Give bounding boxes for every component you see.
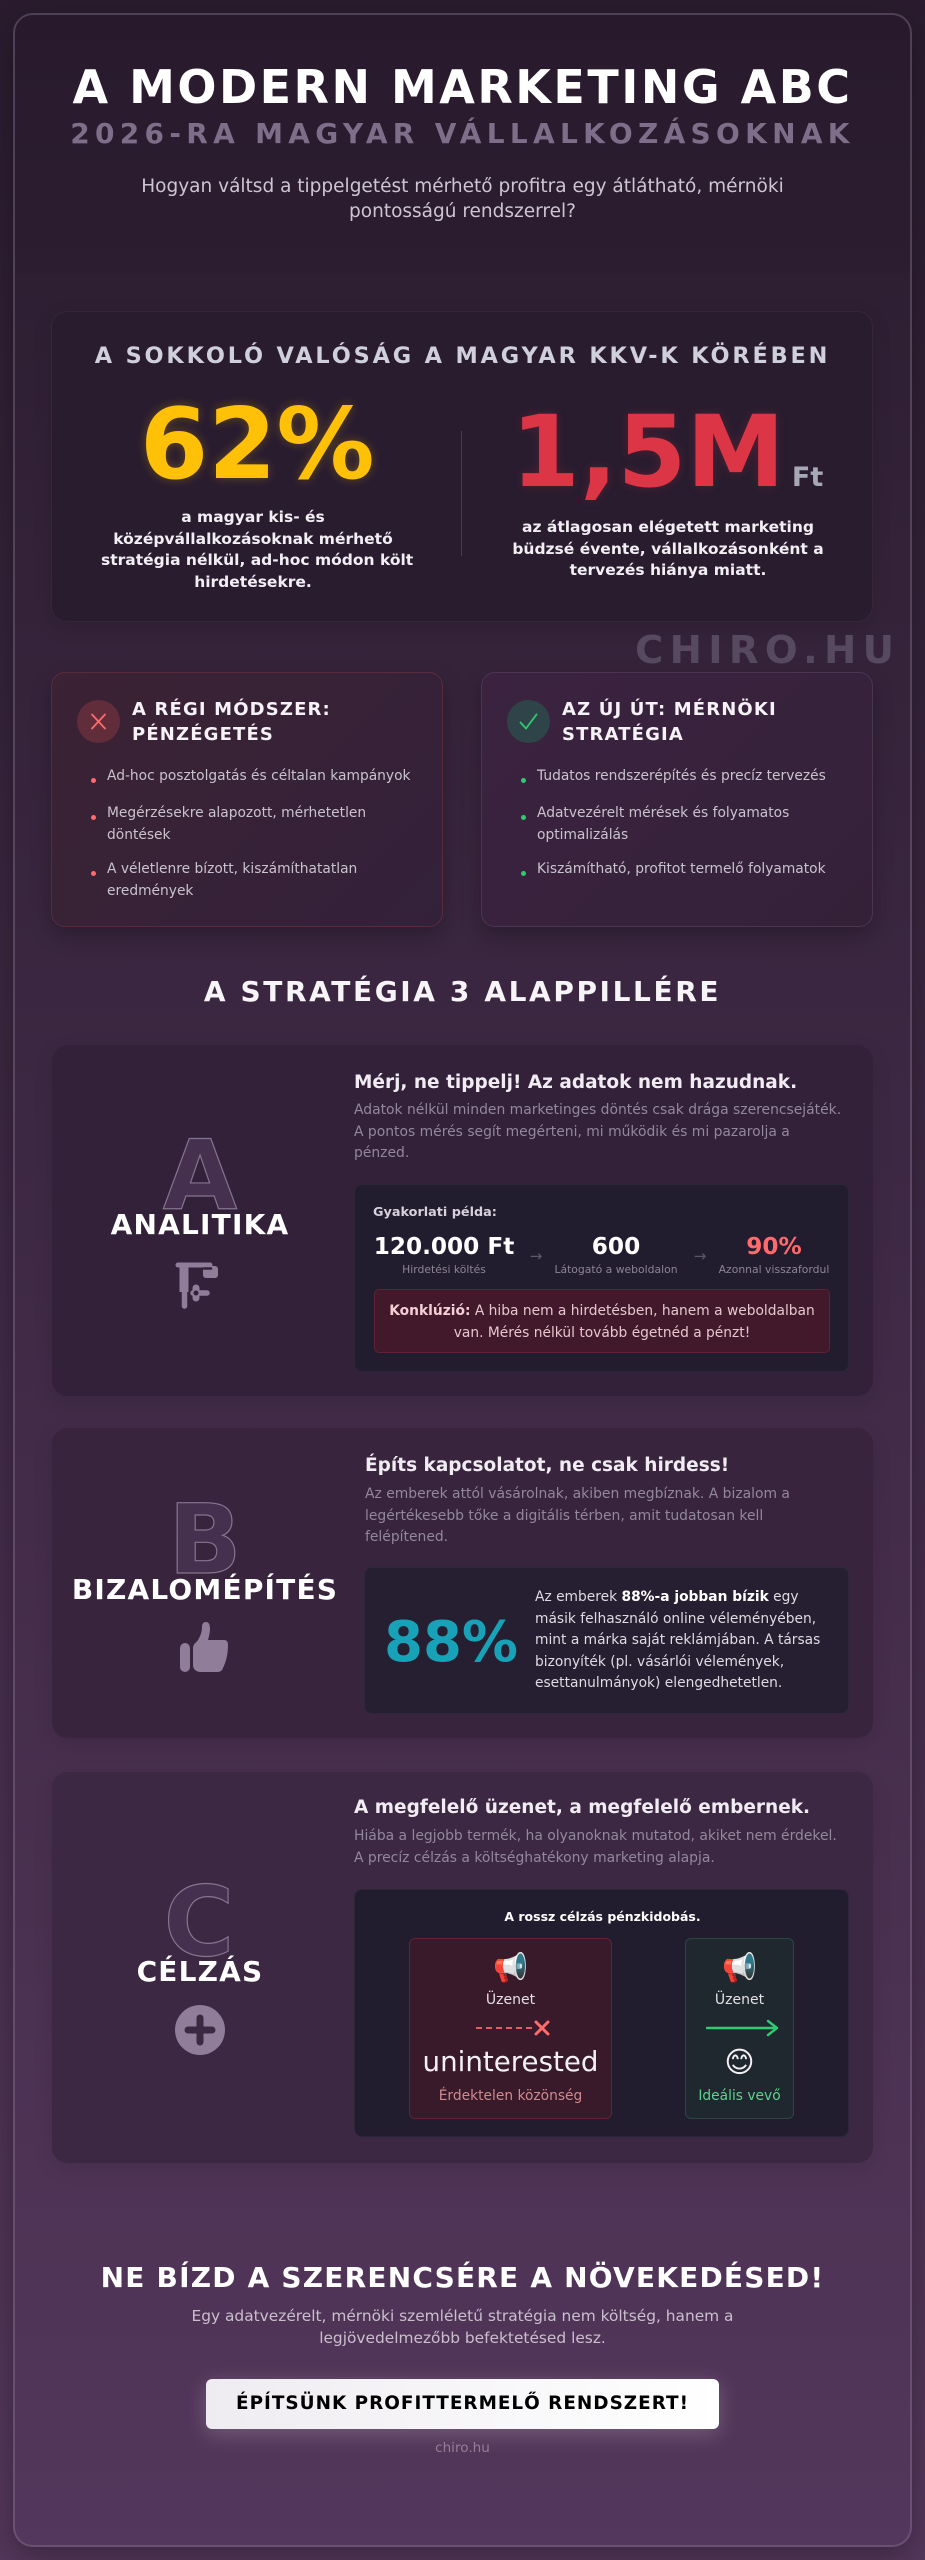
conclusion text [389, 1303, 815, 1341]
bullet [91, 871, 96, 876]
heading: A megfelelő üzenet, a megfelelő embernek. [354, 1797, 810, 1818]
panel: new method [481, 672, 873, 927]
list item [107, 861, 357, 899]
header [15, 15, 910, 273]
audience label: Érdektelen közönség [439, 2088, 582, 2104]
stat: 88%: 88% [384, 1610, 518, 1675]
bullet [521, 871, 526, 876]
cta button [206, 2379, 719, 2429]
letter B: B [168, 1484, 242, 1596]
old method title: PÉNZÉGETÉS [132, 724, 274, 745]
green arrow [706, 2020, 778, 2036]
pillar name: targeting: CÉLZÁS [137, 1955, 263, 1988]
stat description: 1,5M: tervezés hiánya miatt. [570, 561, 766, 579]
icon: plus circle [175, 2005, 225, 2055]
description: A precíz célzás a költséghatékony marketing alapja. [354, 1850, 715, 1866]
stat text: bizonyíték (pl. vásárlói vélemények, [535, 1654, 784, 1670]
list item: Ad-hoc posztolgatás és céltalan kampányok [107, 768, 410, 784]
list item [537, 805, 789, 843]
list item: Tudatos rendszerépítés és precíz tervezés [537, 768, 826, 784]
divider [461, 431, 462, 556]
description: pénzed. [354, 1145, 409, 1161]
new method list [521, 768, 826, 877]
audience word: uninterested [423, 2045, 598, 2078]
intro text: pontosságú rendszerrel? [349, 201, 576, 222]
stat: visitors: 600 [592, 1233, 640, 1260]
stat text: Az emberek 88%-a jobban bízik egy [535, 1589, 799, 1605]
old method title [132, 698, 331, 745]
panel: B trust [52, 1428, 873, 1738]
new method title [562, 698, 777, 745]
conclusion [374, 1289, 830, 1353]
description [354, 1102, 841, 1161]
new method title: STRATÉGIA [562, 724, 684, 745]
description: Adatok nélkül minden marketinges döntés csak drága szerencsejáték. [354, 1102, 841, 1118]
stat description: 1,5M: büdzsé évente, vállalkozásonként a [512, 540, 824, 558]
intro text: Hogyan váltsd a tippelgetést mérhető profitra egy átlátható, mérnöki [141, 176, 784, 197]
description: felépítened. [365, 1529, 448, 1545]
stat description: 1,5M: az átlagosan elégetett marketing [522, 518, 814, 536]
bullet [91, 778, 96, 783]
pillar name: analytics: ANALITIKA [111, 1208, 289, 1241]
panel: shocking reality stats [51, 311, 873, 622]
label: Látogató a weboldalon [554, 1263, 678, 1276]
footer cta [101, 2261, 824, 2456]
panel: old method [51, 672, 443, 927]
message label: Üzenet [486, 1992, 535, 2008]
description [354, 1828, 837, 1866]
cta button: ÉPÍTSÜNK PROFITTERMELŐ RENDSZERT! [236, 2393, 689, 2414]
stat description: 62%: a magyar kis- és [181, 508, 325, 526]
diagram title: A rossz célzás pénzkidobás. [504, 1909, 701, 1924]
list item: A véletlenre bízott, kiszámíthatatlan [107, 861, 357, 877]
icon: megaphone: 📢 [493, 1951, 528, 1984]
subtitle: 2026-RA MAGYAR VÁLLALKOZÁSOKNAK [70, 117, 855, 150]
stat box [364, 1567, 849, 1714]
red case [409, 1938, 612, 2119]
stat text [535, 1589, 820, 1691]
stat: 1,5M Ft: 1,5M Ft [511, 395, 823, 510]
label: Hirdetési költés [402, 1263, 486, 1276]
conclusion text: van. Mérés nélkül tovább égetnéd a pénzt! [454, 1325, 750, 1341]
stat description: 62%: stratégia nélkül, ad-hoc módon költ [101, 551, 413, 569]
letter C: C [164, 1866, 234, 1978]
blocked arrow [476, 2020, 550, 2036]
icon: megaphone: 📢 [722, 1951, 757, 1984]
bullet [521, 815, 526, 820]
icon: check [507, 700, 550, 743]
panel: C targeting [52, 1772, 873, 2163]
stat description: 62% [101, 508, 413, 591]
message label: Üzenet [715, 1992, 764, 2008]
description: legértékesebb tőke a digitális térben, amit tudatosan kell [365, 1508, 763, 1524]
stat text: másik felhasználó online véleményében, [535, 1611, 816, 1627]
list item: optimalizálás [537, 827, 628, 843]
arrow: → [530, 1247, 542, 1265]
list item: döntések [107, 827, 171, 843]
old method title: A RÉGI MÓDSZER: [132, 699, 331, 720]
stat: bounce: 90% [746, 1233, 802, 1260]
cta text: Egy adatvezérelt, mérnöki szemléletű stratégia nem költség, hanem a [192, 2307, 734, 2325]
example box [354, 1184, 849, 1372]
panel: A analytics [52, 1045, 873, 1396]
list item: eredmények [107, 883, 193, 899]
smiley: 😊 [724, 2045, 755, 2079]
old method list [91, 768, 410, 899]
targeting diagram [354, 1889, 849, 2137]
icon: cross [77, 700, 120, 743]
bullet [521, 778, 526, 783]
icon: thumbs up [180, 1622, 228, 1672]
list item: Kiszámítható, profitot termelő folyamatok [537, 861, 826, 877]
new method title: AZ ÚJ ÚT: MÉRNÖKI [562, 699, 777, 720]
stat description: 1,5M [512, 518, 824, 579]
pillar name: trust: BIZALOMÉPÍTÉS [72, 1573, 338, 1606]
stat text: esettanulmányok) elengedhetetlen. [535, 1675, 782, 1691]
title: A MODERN MARKETING ABC [72, 60, 853, 114]
description: Hiába a legjobb termék, ha olyanoknak mutatod, akiket nem érdekel. [354, 1828, 837, 1844]
green case [685, 1938, 794, 2119]
list item: Adatvezérelt mérések és folyamatos [537, 805, 789, 821]
heading: Építs kapcsolatot, ne csak hirdess! [365, 1455, 729, 1476]
section heading: A STRATÉGIA 3 ALAPPILLÉRE [204, 975, 721, 1008]
stat text: mint a márka saját reklámjában. A társas [535, 1632, 820, 1648]
ideal customer label: Ideális vevő [698, 2088, 781, 2104]
stat: ad spend: 120.000 Ft [374, 1233, 514, 1260]
cta heading: NE BÍZD A SZERENCSÉRE A NÖVEKEDÉSED! [101, 2261, 824, 2294]
letter A: A [163, 1120, 237, 1232]
heading: Mérj, ne tippelj! Az adatok nem hazudnak. [354, 1072, 797, 1093]
cta text: legjövedelmezőbb befektetésed lesz. [319, 2329, 606, 2347]
intro text [141, 176, 784, 222]
stat description: 62%: középvállalkozásoknak mérhető [113, 530, 393, 548]
list item [107, 805, 366, 843]
arrow: → [694, 1247, 706, 1265]
icon: chart glyph [176, 1262, 218, 1309]
watermark: CHIRO.HU [635, 628, 900, 673]
description [365, 1486, 790, 1545]
description: A pontos mérés segít megérteni, mi működik és mi pazarolja a [354, 1124, 790, 1140]
cta text [192, 2307, 734, 2347]
conclusion text: Konklúzió: A hiba nem a hirdetésben, hanem a weboldalban [389, 1303, 815, 1319]
stat: 62%: 62% [140, 388, 375, 502]
list item: Megérzésekre alapozott, mérhetetlen [107, 805, 366, 821]
bullet [91, 815, 96, 820]
label: Azonnal visszafordul [719, 1263, 829, 1276]
description: Az emberek attól vásárolnak, akiben megbíznak. A bizalom a [365, 1486, 790, 1502]
site name: chiro.hu [435, 2440, 490, 2456]
example label: Gyakorlati példa: [373, 1205, 497, 1220]
stat description: 62%: hirdetésekre. [194, 573, 312, 591]
stats heading: A SOKKOLÓ VALÓSÁG A MAGYAR KKV-K KÖRÉBEN [95, 343, 830, 369]
